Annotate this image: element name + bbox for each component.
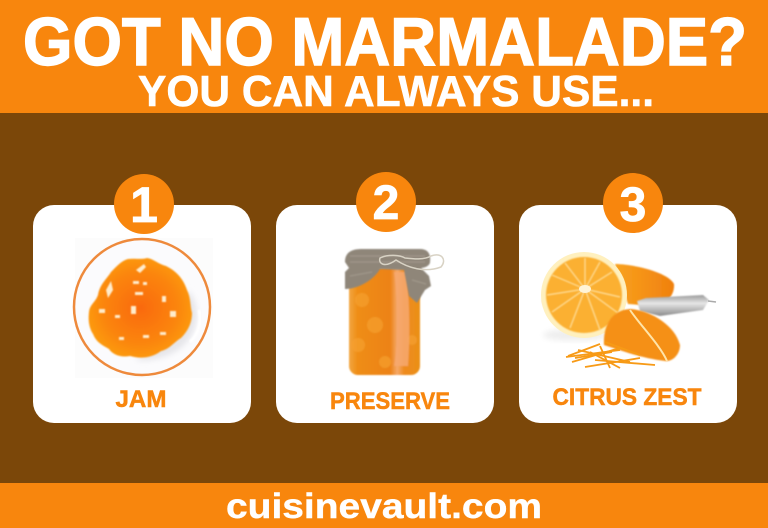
label: jam: JAM <box>116 386 166 413</box>
badge 1: 1 <box>130 177 158 233</box>
badge 2: 2 <box>373 177 399 230</box>
badge 3: 3 <box>620 179 646 232</box>
label: citrus zest: CITRUS ZEST <box>552 384 702 411</box>
badge 1 <box>114 174 174 234</box>
footer url: cuisinevault.com <box>226 487 542 526</box>
label: preserve: PRESERVE <box>330 388 450 415</box>
panel: preserve <box>276 205 494 423</box>
subtitle: YOU CAN ALWAYS USE... <box>138 67 654 116</box>
panel: jam <box>33 205 251 423</box>
badge 2 <box>356 172 416 232</box>
footer band <box>0 483 768 528</box>
header band <box>0 0 768 116</box>
panel: citrus zest <box>519 205 737 423</box>
icon: orange and zester <box>541 252 716 368</box>
icon: jar of preserve <box>345 249 444 375</box>
icon: bowl of jam <box>74 238 213 378</box>
badge 3 <box>603 173 663 233</box>
